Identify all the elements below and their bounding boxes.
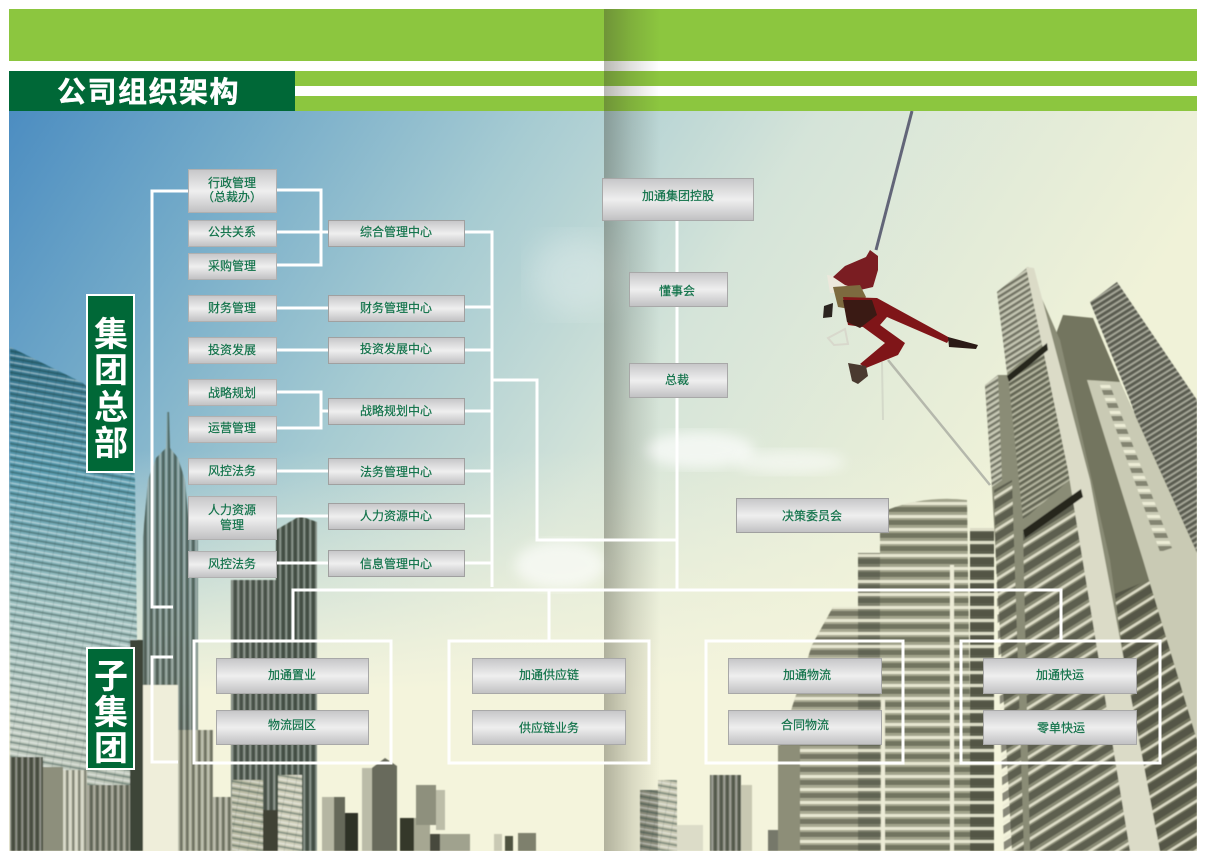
- box: 采购管理: 采购管理: [208, 258, 256, 273]
- label: group headquarters: 部: [94, 425, 128, 463]
- box: 加通供应链: 加通供应链: [519, 667, 579, 682]
- box: 总裁: 总裁: [665, 373, 689, 387]
- box: 行政管理: [188, 170, 276, 212]
- box: 信息管理中心: 信息管理中心: [360, 556, 432, 571]
- box: 投资发展中心: [328, 338, 464, 364]
- box: 信息管理中心: [328, 550, 464, 576]
- label: subsidiary groups: [87, 648, 134, 769]
- box: 人力资源管理: 管理: [220, 517, 244, 532]
- box: 法务管理中心: 法务管理中心: [360, 464, 432, 479]
- photo: left city buildings: [10, 347, 536, 851]
- box: 运营管理: 运营管理: [208, 420, 256, 435]
- box: 零单快运: [984, 710, 1136, 744]
- box: 战略规划中心: 战略规划中心: [360, 403, 432, 418]
- box: 人力资源中心: 人力资源中心: [360, 508, 432, 523]
- box: 战略规划中心: [328, 398, 464, 424]
- box: 物流园区: [216, 710, 368, 744]
- box: 加通置业: 加通置业: [268, 668, 316, 682]
- box: 加通集团控股: [602, 178, 754, 220]
- connector lines: [152, 190, 1061, 762]
- title: 公司组织架构: [57, 76, 240, 109]
- box: 战略规划: [188, 380, 276, 406]
- photo: abseiling climber: [823, 111, 990, 485]
- box: 加通快运: 加通快运: [1036, 668, 1084, 682]
- box: 运营管理: [188, 416, 276, 442]
- box: 人力资源中心: [328, 504, 464, 530]
- box: 财务管理: [188, 296, 276, 322]
- box: 风控法务: [188, 458, 276, 484]
- box: 财务管理: 财务管理: [208, 300, 256, 315]
- label: group headquarters: [87, 295, 134, 472]
- label: group headquarters: 总: [94, 389, 128, 427]
- box: 财务管理中心: [328, 296, 464, 322]
- label: group headquarters: 集: [94, 316, 128, 354]
- box: 公共关系: 公共关系: [208, 225, 256, 239]
- box: 合同物流: [728, 710, 882, 744]
- box: 加通物流: [728, 658, 882, 694]
- box: 加通供应链: [472, 658, 626, 694]
- box: 懂事会: [630, 272, 728, 306]
- box: 公共关系: [188, 220, 276, 246]
- label: subsidiary groups: 团: [94, 730, 128, 768]
- subsidiary frames: [194, 641, 1160, 763]
- label: subsidiary groups: 集: [94, 694, 128, 732]
- box: 懂事会: 懂事会: [659, 284, 695, 298]
- box: 加通物流: 加通物流: [783, 668, 831, 682]
- centre fold shadow: [604, 9, 660, 851]
- box: 法务管理中心: [328, 458, 464, 484]
- box: 投资发展中心: 投资发展中心: [360, 341, 432, 356]
- photo: right skyscrapers: [640, 267, 1197, 851]
- box: 风控法务 2: [188, 552, 276, 578]
- green header bands: [9, 9, 1197, 111]
- department boxes: [188, 170, 1136, 744]
- box: 决策委员会: 决策委员会: [782, 509, 842, 523]
- box: 采购管理: [188, 254, 276, 280]
- box: 风控法务: 风控法务: [208, 463, 256, 478]
- label: subsidiary groups: 子: [94, 658, 128, 696]
- box: 行政管理: （总裁办）: [202, 189, 262, 204]
- box: 财务管理中心: 财务管理中心: [360, 300, 432, 315]
- box: 综合管理中心: 综合管理中心: [360, 224, 432, 239]
- box: 风控法务 2: 风控法务: [208, 556, 256, 571]
- box: 总裁: [630, 364, 728, 398]
- box: 投资发展: [188, 338, 276, 364]
- box: 人力资源管理: [188, 496, 276, 540]
- box: 决策委员会: [736, 498, 888, 532]
- box: 加通快运: [984, 658, 1136, 694]
- label: group headquarters: 团: [94, 352, 128, 390]
- box: 物流园区: 物流园区: [268, 718, 316, 732]
- box: 人力资源管理: 人力资源: [208, 503, 256, 517]
- box: 加通集团控股: 加通集团控股: [642, 188, 714, 203]
- box: 供应链业务: 供应链业务: [519, 720, 579, 735]
- box: 合同物流: 合同物流: [781, 717, 829, 732]
- box: 供应链业务: [472, 710, 626, 744]
- box: 零单快运: 零单快运: [1037, 721, 1085, 735]
- box: 投资发展: 投资发展: [208, 342, 256, 357]
- box: 加通置业: [216, 658, 368, 694]
- box: 综合管理中心: [328, 220, 464, 246]
- title: [9, 71, 295, 111]
- box: 行政管理: 行政管理: [208, 175, 256, 190]
- box: 战略规划: 战略规划: [208, 385, 256, 400]
